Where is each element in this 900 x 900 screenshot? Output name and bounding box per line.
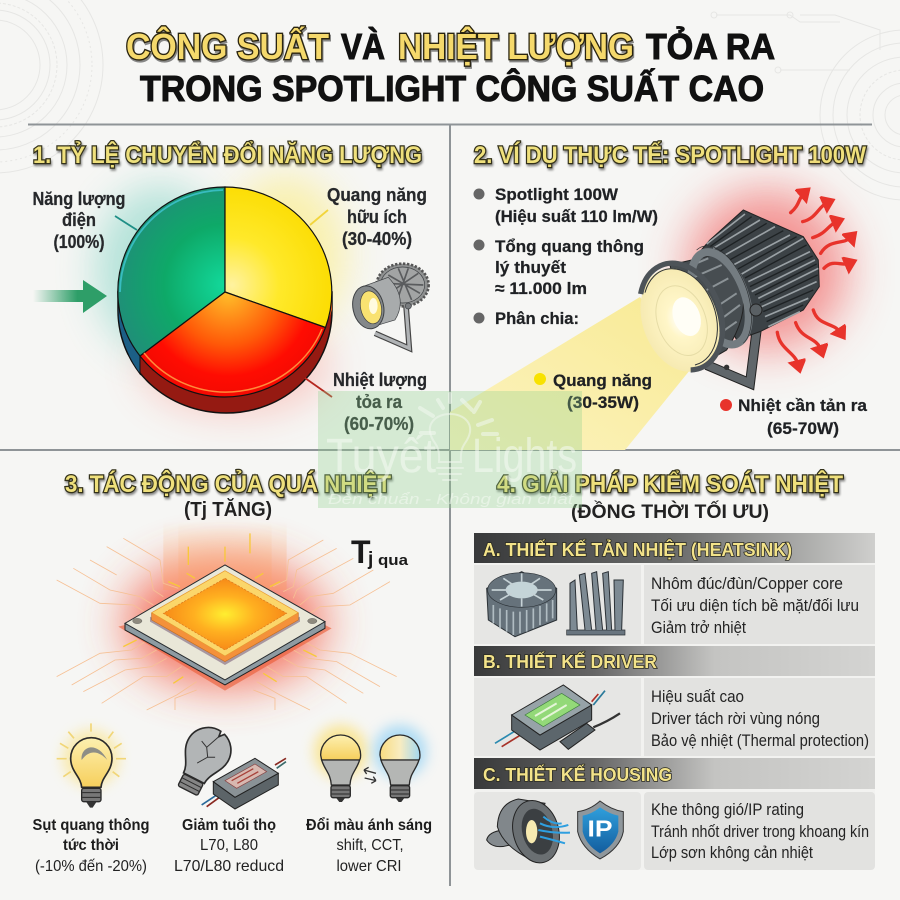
caption: lifetime: Giảm tuổi thọ: [182, 816, 276, 834]
panel background: [474, 533, 875, 870]
label: waste heat: [305, 370, 427, 434]
section B: driver: [474, 646, 875, 756]
list A: Giảm trở nhiệt: [651, 618, 746, 637]
label: light power: [534, 371, 652, 412]
list A: Nhôm đúc/đùn/Copper core: [651, 574, 843, 593]
label: Tj: T: [351, 534, 371, 570]
icon: vented housing and IP shield: IP: [587, 816, 612, 842]
caption: colour shift: shift, CCT,: [336, 837, 404, 854]
label: electric energy: điện: [62, 210, 96, 230]
label: waste heat: tỏa ra: [356, 392, 403, 412]
label: useful light: [310, 185, 427, 249]
label: light power: Quang năng: [553, 371, 652, 390]
icon: small spotlight: [349, 264, 429, 348]
label: electric energy: Năng lượng: [32, 189, 126, 209]
caption: lifetime: [174, 816, 284, 875]
icon: driver and USB: [495, 685, 620, 750]
heading 3: 3. TÁC ĐỘNG CỦA QUÁ NHIỆT: [65, 469, 391, 498]
label: electric energy: (100%): [54, 232, 104, 252]
icon: broken bulb and driver: [167, 720, 286, 809]
section C: housing: C. THIẾT KẾ HOUSING: [483, 764, 672, 785]
label: heat power: (65-70W): [767, 419, 839, 438]
title: CÔNG SUẤT: [126, 25, 329, 67]
list B: Driver tách rời vùng nóng: [651, 709, 820, 728]
list C: Lớp sơn không cản nhiệt: [651, 843, 813, 862]
list C: [651, 800, 869, 862]
panel: thermal control solutions: [474, 469, 875, 870]
caption: lumen drop: (-10% đến -20%): [35, 858, 147, 875]
list A: [651, 574, 859, 637]
caption: lifetime: L70, L80: [200, 837, 258, 854]
icon: colour-shifted bulbs: [314, 725, 427, 802]
caption: colour shift: [306, 816, 432, 875]
bullet list: [474, 185, 658, 328]
section C: housing: [474, 758, 875, 870]
icon: vented housing and IP shield: [487, 795, 623, 868]
list B: Hiệu suất cao: [651, 687, 744, 706]
label: Tj: qua: [378, 552, 409, 569]
label: waste heat: Nhiệt lượng: [333, 370, 427, 390]
label: light power: (30-35W): [567, 393, 639, 412]
label: useful light: Quang năng: [327, 185, 427, 205]
illustration: overheating LED chip: [57, 522, 397, 710]
bullet list: (Hiệu suất 110 lm/W): [495, 207, 658, 226]
title: NHIỆT LƯỢNG: [398, 25, 634, 67]
title: [126, 25, 775, 109]
section A: heatsink: A. THIẾT KẾ TẢN NHIỆT (HEATSINK): [483, 539, 792, 560]
title: TỎA RA: [646, 25, 775, 67]
label: heat power: Nhiệt cần tản ra: [738, 396, 868, 415]
label: waste heat: (60-70%): [344, 414, 414, 434]
pie chart: [95, 175, 345, 415]
panel: energy conversion: [32, 140, 429, 434]
label: Tj: j: [367, 549, 373, 570]
bullet list: ≈ 11.000 lm: [495, 279, 587, 298]
caption: colour shift: Đổi màu ánh sáng: [306, 816, 432, 834]
label: useful light: hữu ích: [347, 207, 407, 227]
bullet list: Tổng quang thông: [495, 237, 644, 256]
watermark: [318, 391, 582, 508]
icon: heatsinks: [487, 572, 625, 637]
caption: lumen drop: tức thời: [63, 837, 119, 854]
panel: real example: [450, 141, 868, 450]
heading 1: 1. TỶ LỆ CHUYỂN ĐỔI NĂNG LƯỢNG: [33, 140, 422, 169]
subheading: (ĐỒNG THỜI TỐI ƯU): [571, 501, 769, 523]
light beam: [450, 297, 690, 450]
label: Tj: [351, 534, 409, 570]
illustration: large spotlight with heat: [627, 190, 851, 383]
section B: driver: B. THIẾT KẾ DRIVER: [483, 651, 657, 672]
title: VÀ: [341, 26, 385, 67]
caption: colour shift: lower CRI: [336, 858, 402, 875]
watermark: Đèn chuẩn - Không gian chất: [328, 491, 574, 508]
caption: lumen drop: [32, 817, 150, 875]
label: electric energy: [32, 189, 137, 252]
heading 2: 2. VÍ DỤ THỰC TẾ: SPOTLIGHT 100W: [474, 141, 866, 169]
label: useful light: (30-40%): [342, 229, 412, 249]
subheading: (Tj TĂNG): [184, 498, 272, 521]
title: TRONG SPOTLIGHT CÔNG SUẤT CAO: [140, 67, 764, 109]
list B: [651, 687, 869, 750]
list C: Khe thông gió/IP rating: [651, 800, 804, 819]
heading 4: 4. GIẢI PHÁP KIỂM SOÁT NHIỆT: [497, 469, 843, 498]
caption: lumen drop: Sụt quang thông: [32, 817, 150, 834]
watermark: Tuyết: [326, 430, 436, 483]
watermark: Lights: [472, 430, 577, 483]
bullet list: Phân chia:: [495, 309, 579, 328]
arrow: energy input: [33, 280, 107, 313]
icon: dimming bulb: [57, 723, 126, 808]
caption: lifetime: L70/L80 reducd: [174, 858, 284, 875]
list B: Bảo vệ nhiệt (Thermal protection): [651, 731, 869, 750]
label: heat power: [720, 396, 868, 438]
bullet list: lý thuyết: [495, 258, 566, 277]
list A: Tối ưu diện tích bề mặt/đối lưu: [651, 596, 859, 615]
panel: overheating effects: [32, 469, 432, 875]
bullet list: Spotlight 100W: [495, 185, 619, 204]
section A: heatsink: [474, 533, 875, 644]
